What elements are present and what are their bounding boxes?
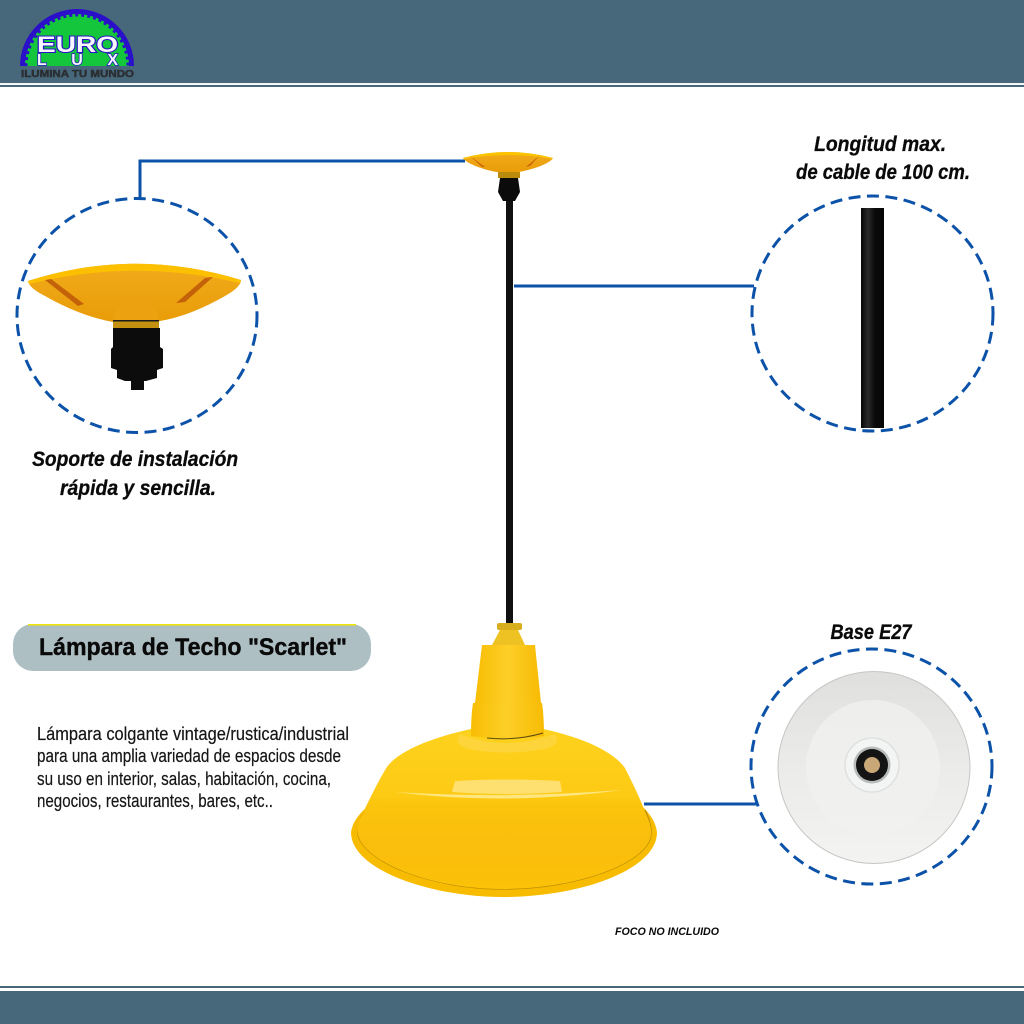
shade rim inner line — [358, 809, 651, 889]
shade highlight — [452, 780, 562, 794]
dashed circle — [17, 198, 257, 432]
logo wordmark — [37, 32, 118, 69]
dashed circle — [751, 649, 992, 884]
logo sunburst — [20, 9, 134, 66]
logo wordmark: EURO — [37, 32, 118, 57]
cable — [506, 198, 513, 626]
connector line: ceiling mount — [140, 161, 465, 198]
dashed circle — [752, 196, 993, 431]
lamp collar — [492, 623, 525, 645]
lamp neck — [475, 645, 541, 703]
product: pendant lamp — [351, 152, 657, 897]
label: installation support: rápida y sencilla. — [60, 477, 216, 500]
logo: Eurolux — [20, 9, 134, 80]
large ceiling mount — [28, 264, 241, 390]
label: cable length: de cable de 100 cm. — [796, 161, 970, 184]
shade interior — [778, 672, 970, 864]
disclaimer note: FOCO NO INCLUIDO — [615, 926, 719, 938]
shade reflection line — [395, 790, 622, 799]
logo tagline: ILUMINA TU MUNDO — [21, 69, 134, 80]
shade rim — [351, 807, 657, 897]
description text: su uso en interior, salas, habitación, cocina, — [37, 769, 331, 789]
shade body — [358, 729, 651, 889]
title: Lámpara de Techo "Scarlet" — [39, 634, 347, 661]
lamp neck band — [471, 703, 544, 738]
description text: para una amplia variedad de espacios desde — [37, 746, 341, 766]
shade collar ring — [458, 734, 557, 752]
connector line: cable — [514, 284, 754, 288]
callout: ceiling mount detail — [17, 198, 257, 432]
description text: Lámpara colgante vintage/rustica/industrial — [37, 724, 349, 744]
label: cable length: Longitud max. — [814, 133, 946, 156]
title pill — [13, 624, 371, 671]
label: base E27: Base E27 — [830, 621, 913, 644]
logo wordmark: LUX — [37, 52, 118, 69]
label: installation support: Soporte de instalación — [32, 448, 238, 471]
callout: E27 base detail — [751, 649, 992, 884]
header bar — [0, 0, 1024, 87]
cable close-up — [861, 208, 884, 428]
small ceiling mount — [463, 152, 553, 201]
lamp shade — [351, 729, 657, 897]
footer bar — [0, 986, 1024, 1024]
callout: cable detail — [752, 196, 993, 431]
description text: negocios, restaurantes, bares, etc.. — [37, 791, 273, 811]
connector line: base — [644, 802, 756, 806]
